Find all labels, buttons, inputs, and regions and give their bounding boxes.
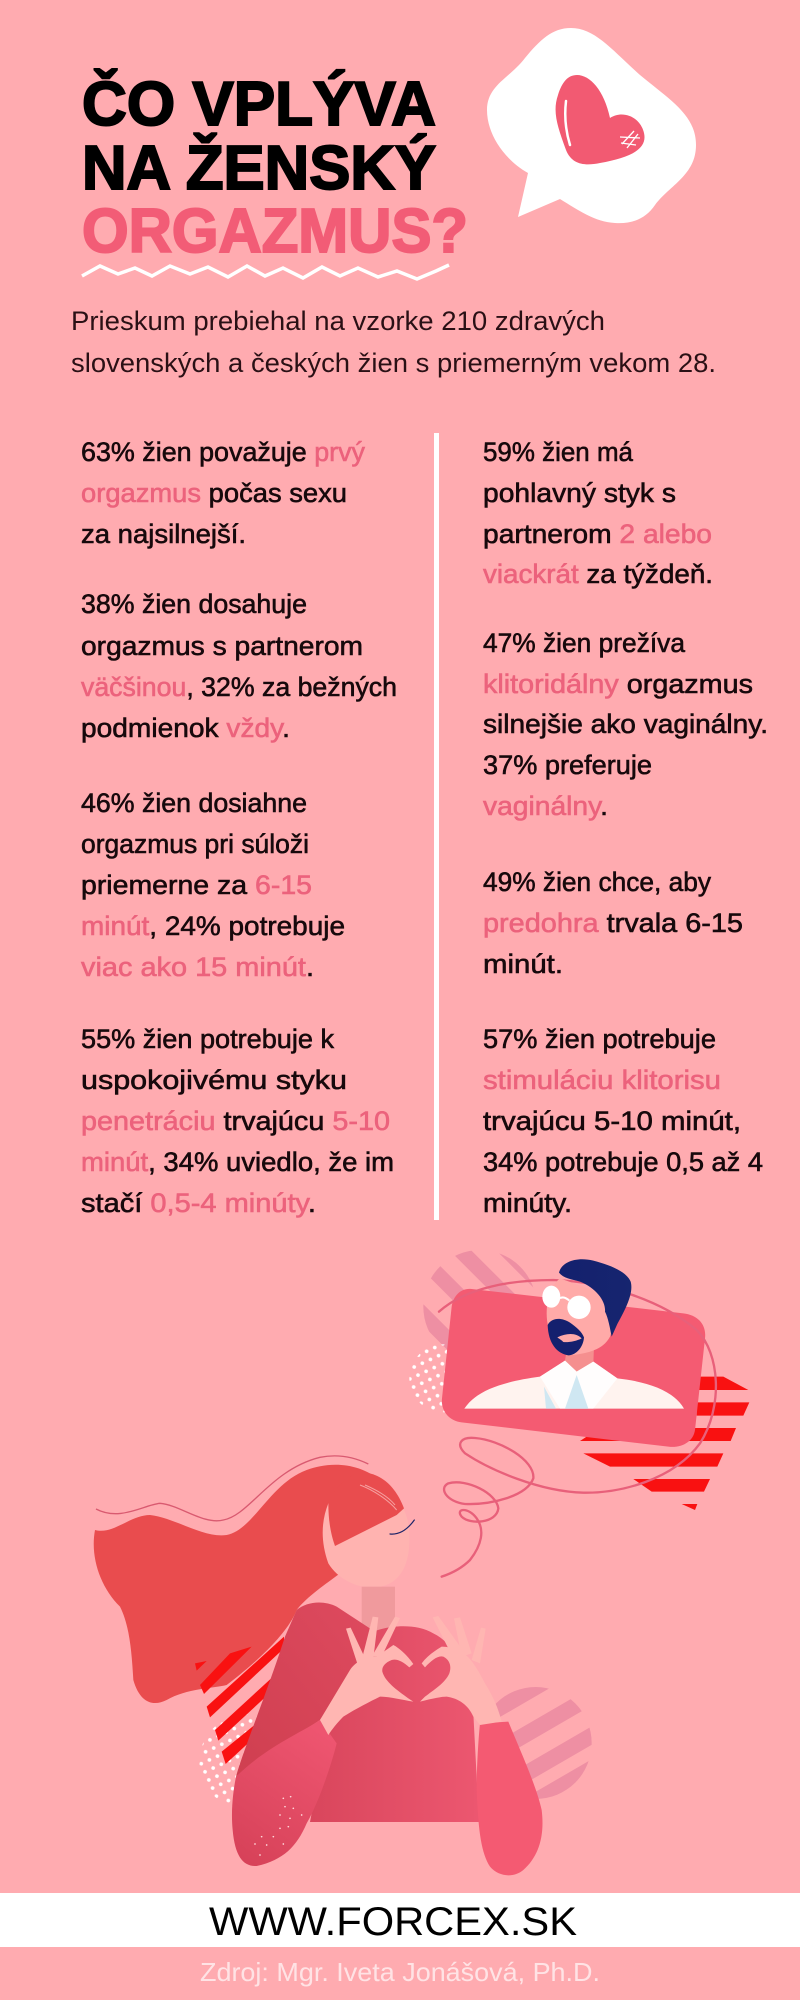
hair — [559, 1259, 631, 1337]
intro text — [71, 306, 716, 378]
upper arm — [236, 1603, 373, 1777]
text block: penetrácia: uspokojivému styku — [81, 1065, 347, 1095]
text block: prvý orgazmus: za najsilnejší. — [81, 519, 246, 549]
text block: pri súloži — [81, 788, 345, 982]
face — [323, 1503, 409, 1588]
text block: penetrácia: penetráciu trvajúcu 5-10 — [81, 1106, 390, 1136]
heart stitches — [620, 131, 640, 148]
hair wisp — [96, 1456, 368, 1521]
zigzag underline — [82, 265, 449, 279]
column divider — [434, 433, 439, 1220]
footer: website band: WWW.FORCEX.SK — [209, 1900, 577, 1944]
text block: pri súloži: priemerne za 6-15 — [81, 870, 312, 900]
text block: penetrácia: stačí 0,5-4 minúty . — [81, 1188, 316, 1218]
title: ORGAZMUS? — [82, 197, 468, 266]
shirt — [464, 1361, 684, 1409]
striped circle — [496, 1687, 592, 1799]
red striped triangle — [580, 1377, 749, 1510]
text block: s partnerom: orgazmus s partnerom — [81, 631, 363, 661]
text block: stimulácia klitorisu: stimuláciu klitorisu — [483, 1065, 721, 1095]
dots — [409, 1344, 477, 1412]
torso — [310, 1626, 479, 1822]
footer: website band — [0, 1893, 800, 1947]
text block: s partnerom — [81, 589, 397, 743]
text block: klitoridálny orgazmus — [483, 628, 768, 821]
text block: pohlavný styk: 59% žien má — [483, 437, 634, 467]
text block: s partnerom: podmienok vždy. — [81, 713, 290, 743]
text block: stimulácia klitorisu: trvajúcu 5-10 minút, — [483, 1106, 741, 1136]
text block: predohra: predohra trvala 6-15 — [483, 908, 743, 938]
heart — [556, 75, 645, 164]
text block: penetrácia: minút, 34% uviedlo, že im — [81, 1147, 394, 1177]
striped circle — [423, 1250, 533, 1350]
text block: pri súloži: 46% žien dosiahne — [81, 788, 307, 818]
text block: stimulácia klitorisu: minúty. — [483, 1188, 572, 1218]
title — [82, 70, 468, 266]
text block: prvý orgazmus: orgazmus počas sexu — [81, 478, 347, 508]
neck — [362, 1587, 395, 1630]
text block: klitoridálny orgazmus: vaginálny. — [483, 791, 608, 821]
icon: speech bubble with heart — [487, 28, 696, 223]
hair — [94, 1465, 407, 1703]
text block: pri súloži: orgazmus pri súloži — [81, 829, 309, 859]
tie — [565, 1375, 588, 1409]
right sleeve — [477, 1722, 543, 1875]
text block: prvý orgazmus — [81, 437, 365, 549]
illustration: woman with heart hands — [94, 1456, 613, 1875]
text block: klitoridálny orgazmus: 47% žien prežíva — [483, 628, 686, 658]
red stripes — [195, 1637, 284, 1764]
text block: prvý orgazmus: 63% žien považuje prvý — [81, 437, 365, 467]
sleeve sparkles — [254, 1796, 302, 1856]
text block: stimulácia klitorisu: 34% potrebuje 0,5 až 4 — [483, 1147, 763, 1177]
footer: source: Zdroj: Mgr. Iveta Jonášová, Ph.D. — [200, 1957, 600, 1987]
left sleeve — [232, 1720, 337, 1866]
text block: klitoridálny orgazmus: silnejšie ako vaginálny. — [483, 709, 768, 739]
dots — [199, 1714, 294, 1809]
bangs — [328, 1473, 404, 1546]
text block: penetrácia: 55% žien potrebuje k — [81, 1024, 334, 1054]
text block: pohlavný styk — [483, 437, 713, 589]
text block: pri súloži: minút, 24% potrebuje — [81, 911, 345, 941]
hair strands — [360, 1485, 397, 1510]
right hand — [420, 1616, 502, 1725]
left hand — [320, 1617, 413, 1735]
text block: klitoridálny orgazmus: klitoridálny orgazmus — [483, 669, 753, 699]
text block: pohlavný styk: partnerom 2 alebo — [483, 519, 712, 549]
text block: predohra: 49% žien chce, aby — [483, 867, 711, 897]
text block: predohra — [483, 867, 743, 979]
text block: klitoridálny orgazmus: 37% preferuje — [483, 750, 652, 780]
card — [442, 1289, 705, 1447]
title: ČO VPLÝVA — [82, 70, 436, 139]
heart highlight — [565, 101, 570, 145]
intro text: slovenských a českých žien s priemerným vekom 28. — [71, 348, 716, 378]
speech bubble — [487, 28, 696, 223]
text block: stimulácia klitorisu: 57% žien potrebuje — [483, 1024, 716, 1054]
eyelash — [390, 1520, 414, 1534]
text block: pohlavný styk: pohlavný styk s — [483, 478, 676, 508]
neck — [564, 1347, 594, 1373]
text block: s partnerom: väčšinou, 32% za bežných — [81, 672, 397, 702]
man — [464, 1259, 684, 1409]
face — [547, 1278, 612, 1355]
text block: stimulácia klitorisu — [483, 1024, 763, 1218]
text block: predohra: minút. — [483, 949, 563, 979]
title: NA ŽENSKÝ — [82, 134, 436, 203]
illustration: man in thought bubble — [400, 1233, 749, 1577]
text block: penetrácia — [81, 1024, 394, 1218]
glasses — [567, 1296, 591, 1319]
swirl line — [439, 1280, 716, 1577]
text block: s partnerom: 38% žien dosahuje — [81, 589, 307, 619]
beard — [548, 1319, 584, 1355]
intro text: Prieskum prebiehal na vzorke 210 zdravých — [71, 306, 605, 336]
text block: pri súloži: viac ako 15 minút . — [81, 952, 314, 982]
text block: pohlavný styk: viackrát za týždeň. — [483, 559, 713, 589]
